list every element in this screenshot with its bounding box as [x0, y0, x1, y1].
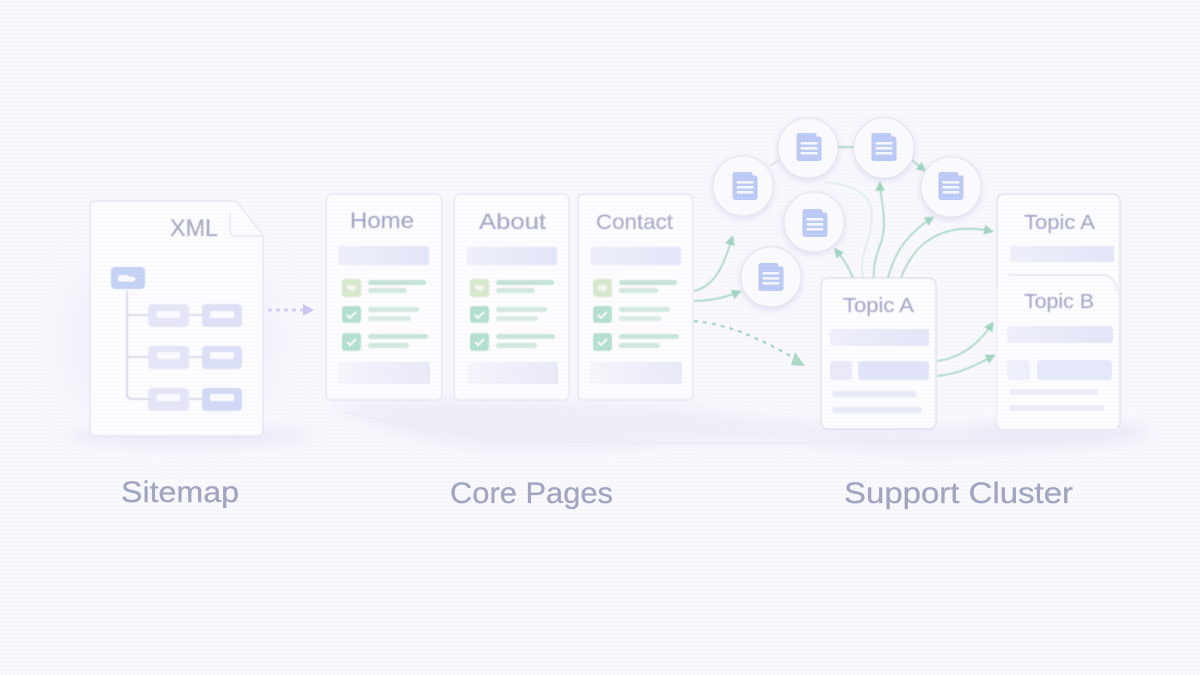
Topic A title: Topic A — [843, 295, 915, 317]
XML label: XML — [170, 215, 218, 242]
label: Support Cluster: Support Cluster — [844, 477, 1073, 510]
Topic A right title: Topic A — [1024, 212, 1096, 234]
Contact title: Contact — [596, 211, 673, 234]
panel: Contact card — [578, 194, 693, 400]
icon: document node left — [713, 156, 773, 216]
tree lines — [127, 291, 202, 399]
arrows: green connectors — [694, 147, 993, 376]
label: Sitemap: Sitemap — [121, 476, 239, 509]
arrow: dashed green to Topic A — [694, 321, 805, 366]
panel: sitemap document — [90, 201, 263, 436]
icon: document node lower — [741, 247, 801, 307]
panel: Topic B card — [997, 275, 1117, 429]
label: Core Pages: Core Pages — [450, 477, 613, 510]
Topic B title: Topic B — [1024, 291, 1094, 313]
panel: About card — [454, 194, 569, 400]
panel: Topic A card right — [997, 194, 1120, 429]
root node — [111, 267, 145, 289]
fold — [230, 214, 262, 236]
icon: document node top right — [854, 118, 914, 178]
icon: document node top left — [778, 118, 838, 178]
panel: Topic A card centre — [821, 278, 936, 429]
ground shadows — [65, 250, 1160, 454]
icon: document node centre — [784, 192, 844, 252]
About title: About — [479, 209, 547, 234]
icon: document node right — [921, 157, 981, 217]
Home title: Home — [350, 208, 414, 233]
tree nodes — [148, 304, 242, 411]
panel: Home card — [326, 194, 442, 400]
arrow: sitemap to core pages — [268, 304, 314, 316]
